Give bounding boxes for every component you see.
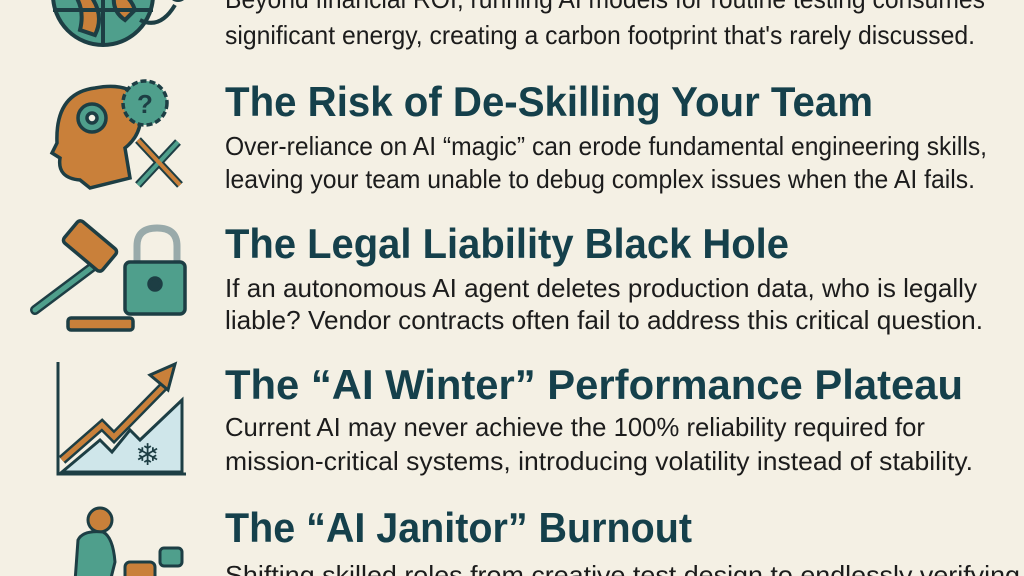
section 1 text: significant energy, creating a carbon footprint that's rarely discussed. xyxy=(225,20,975,50)
section 3 text: liable? Vendor contracts often fail to address this critical question. xyxy=(225,305,983,335)
icon: gavel and broken lock xyxy=(35,219,185,330)
section 3 text: If an autonomous AI agent deletes production data, who is legally xyxy=(225,273,977,303)
heading 2: The Risk of De-Skilling Your Team xyxy=(225,78,873,125)
section 4 text xyxy=(225,412,973,476)
icon: chart with arrow and ice xyxy=(58,362,186,474)
section 3 text xyxy=(225,273,983,335)
section 1 text xyxy=(225,0,985,50)
heading 3: The Legal Liability Black Hole xyxy=(225,220,789,267)
icon: head with gears and tools xyxy=(52,81,180,188)
heading 4: The “AI Winter” Performance Plateau xyxy=(225,361,963,408)
section 2 text: Over-reliance on AI “magic” can erode fundamental engineering skills, xyxy=(225,131,987,161)
icon: globe with plug xyxy=(53,0,186,45)
section 4 text: mission-critical systems, introducing volatility instead of stability. xyxy=(225,446,973,476)
icon: burnt-out person with robots xyxy=(75,508,182,576)
icon: chart with arrow and ice: ❄ xyxy=(135,438,160,473)
section 2 text xyxy=(225,131,987,194)
heading 5: The “AI Janitor” Burnout xyxy=(225,504,692,551)
icon: head with gears and tools: ? xyxy=(137,89,153,119)
section 2 text: leaving your team unable to debug complex issues when the AI fails. xyxy=(225,164,975,194)
section 4 text: Current AI may never achieve the 100% reliability required for xyxy=(225,412,925,442)
